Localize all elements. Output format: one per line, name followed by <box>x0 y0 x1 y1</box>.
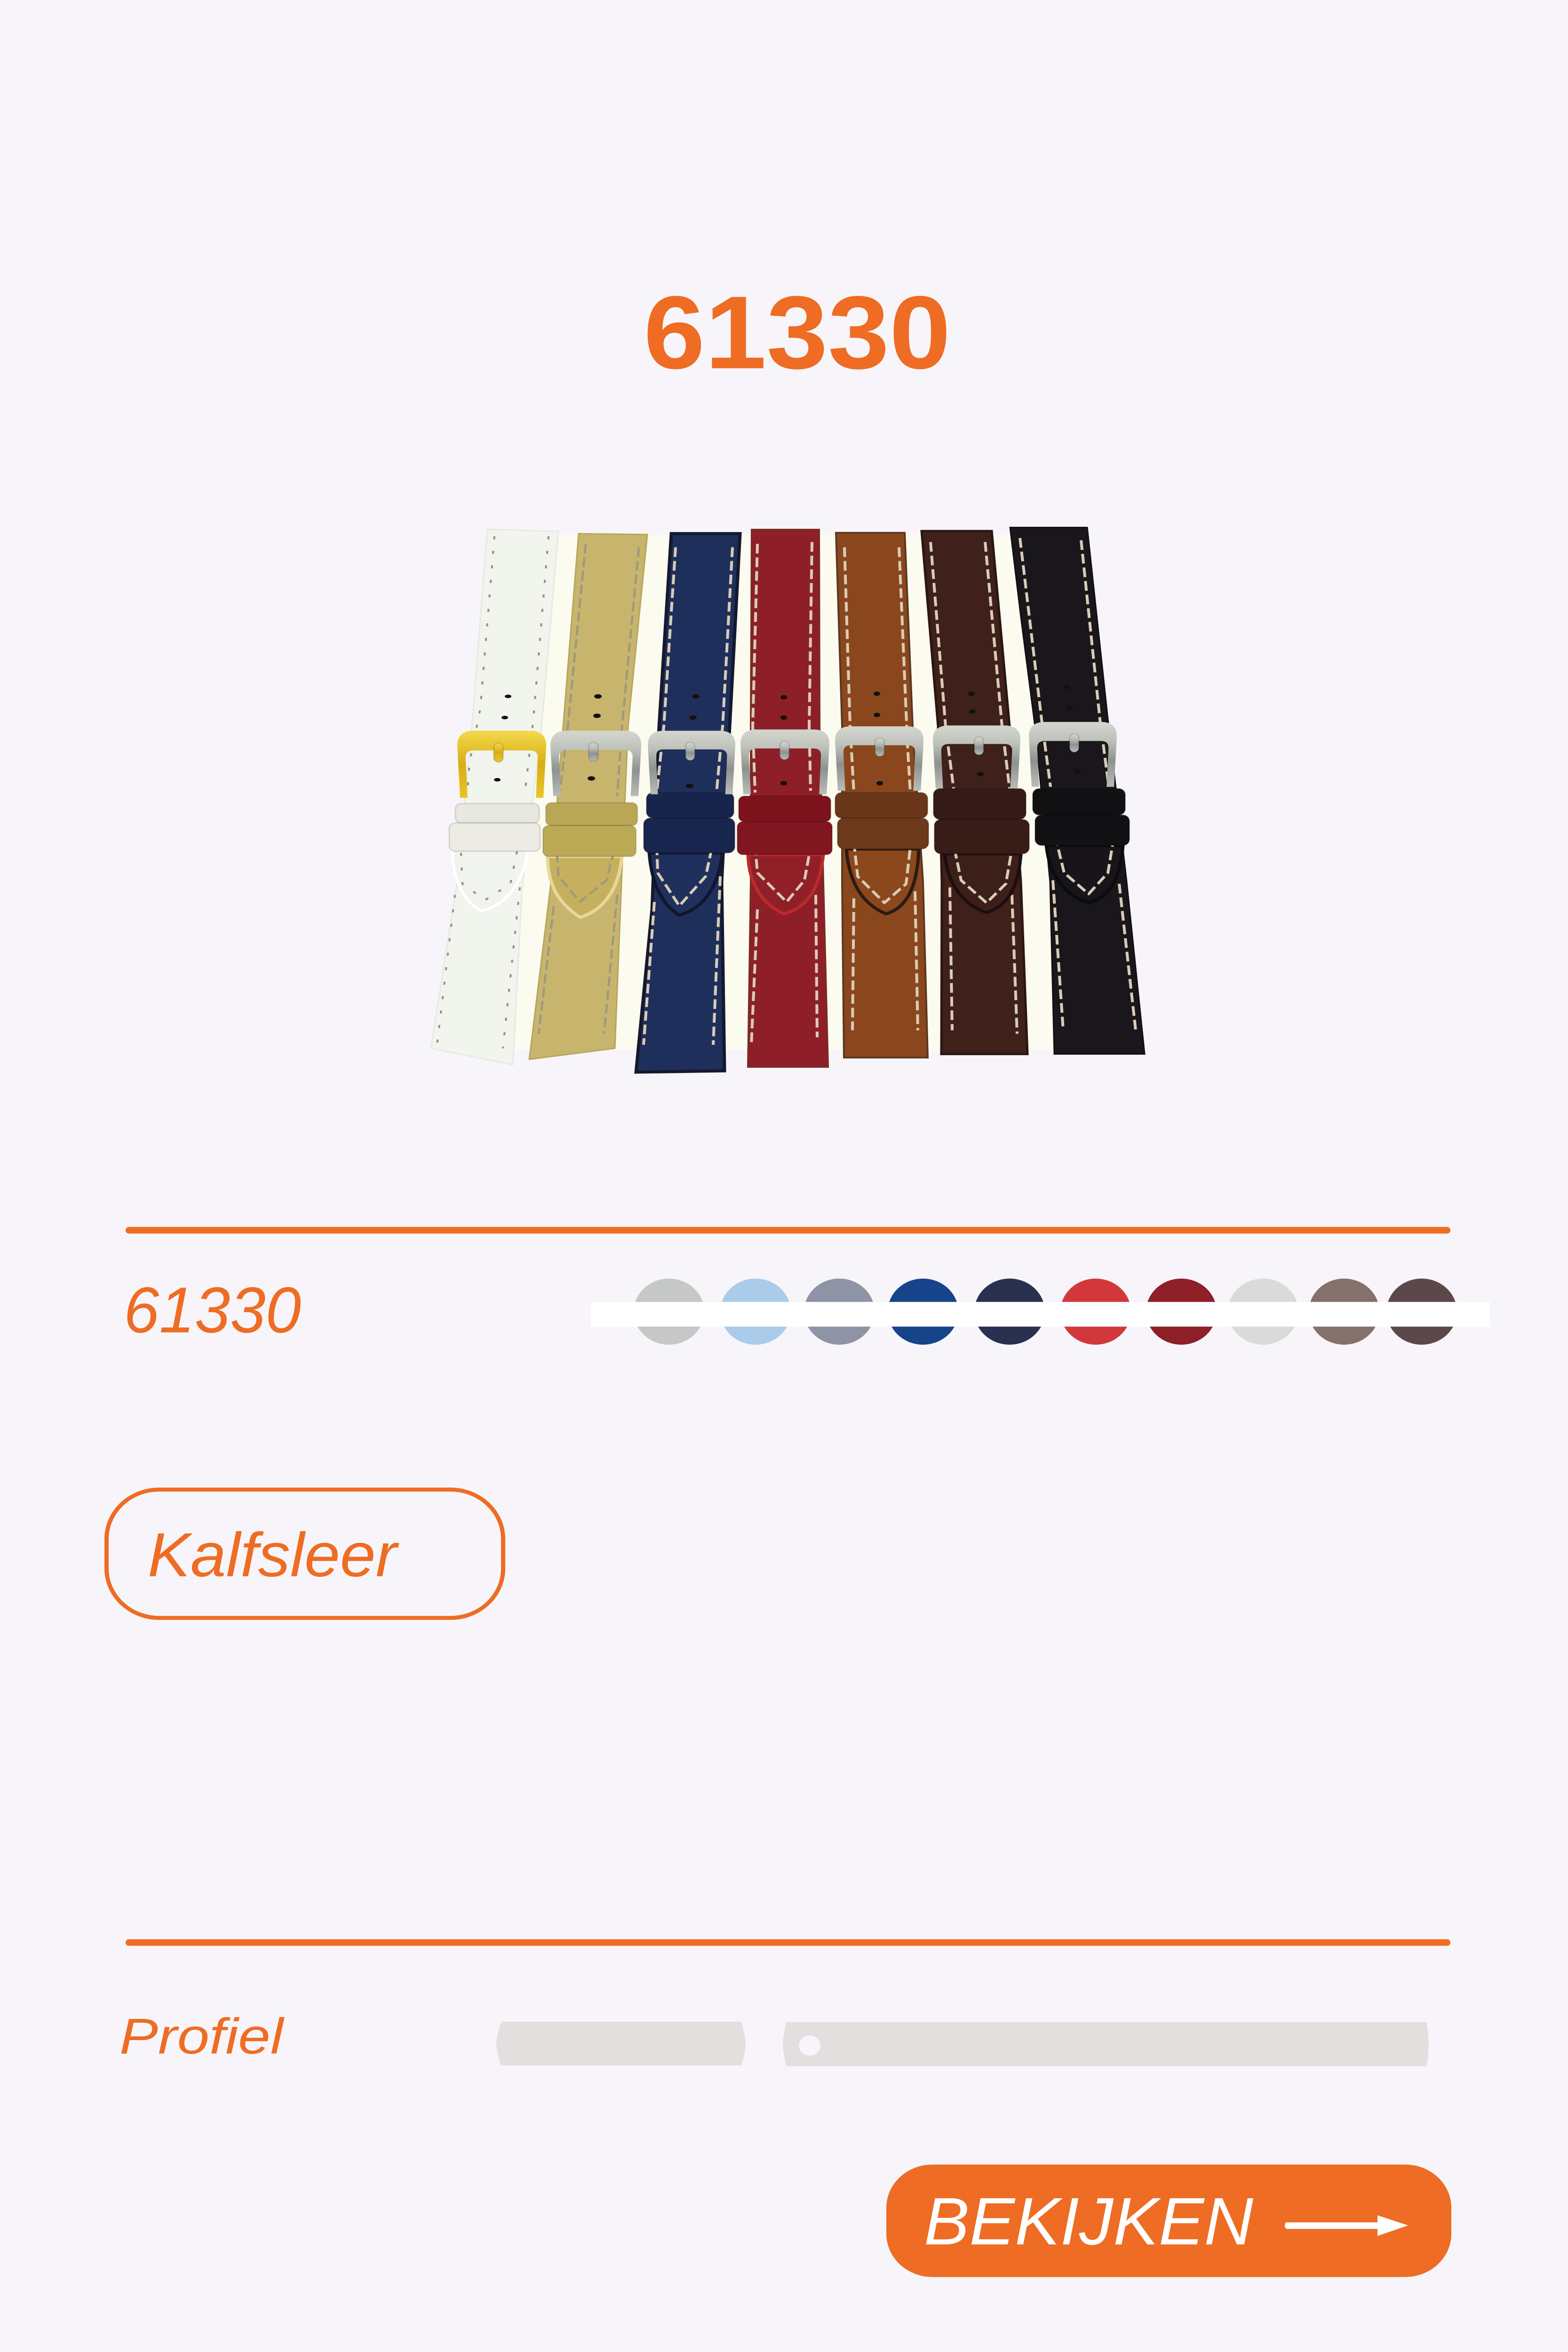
strap: dark brown <box>922 531 1029 1054</box>
model number label: 61330 <box>124 1274 301 1346</box>
title: 61330 <box>644 275 951 390</box>
button: BEKIJKEN: BEKIJKEN <box>924 2185 1254 2259</box>
material tag: Kalfsleer <box>106 1490 503 1618</box>
strap: black <box>1010 527 1145 1054</box>
divider line: top <box>126 1227 1450 1233</box>
divider line: bottom <box>126 1939 1450 1946</box>
strap: navy <box>636 533 740 1072</box>
material tag: Kalfsleer: Kalfsleer <box>148 1520 399 1589</box>
arrow <box>1285 2215 1408 2236</box>
colour swatches <box>591 1279 1490 1345</box>
strap: brown <box>835 533 929 1057</box>
strap: khaki <box>529 533 647 1059</box>
profile diagram: short strap piece <box>496 2022 746 2066</box>
button: BEKIJKEN <box>886 2165 1451 2277</box>
strap: red <box>737 530 832 1067</box>
product photo: seven watch straps <box>431 527 1145 1072</box>
profile diagram: long strap piece <box>783 2022 1429 2066</box>
strap: white <box>431 529 558 1065</box>
profile label: Profiel <box>119 2009 285 2064</box>
